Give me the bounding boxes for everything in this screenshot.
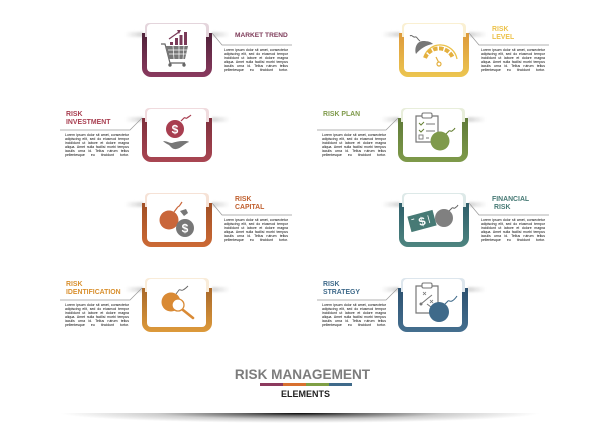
text block: risk capital: incididunt ut labore et dolore magna — [224, 226, 288, 230]
panel: market trend — [128, 23, 292, 77]
text block: risk strategy: Lorem ipsum dolor sit amet, consectetur — [322, 303, 386, 307]
text block: risk capital: aliqua. Amet nulla facilisi morbi tempus — [224, 230, 288, 234]
text block: risk strategy: adipiscing elit, sed do eiusmod tempor — [322, 307, 386, 311]
heading: risk level: LEVEL — [492, 34, 514, 41]
text block: risk plan: incididunt ut labore et dolore magna — [322, 141, 386, 145]
text block: market trend: Lorem ipsum dolor sit amet, consectetur — [224, 48, 288, 52]
icon: checklist clipboard and bomb — [415, 112, 456, 150]
panel: risk strategy — [317, 278, 482, 332]
text block: risk capital: iaculis urna id. Tellus rutrum tellus — [224, 234, 288, 238]
icon: banknote and bomb — [407, 204, 458, 232]
text block: market trend: aliqua. Amet nulla facilisi morbi tempus — [224, 60, 288, 64]
heading: financial risk — [492, 196, 529, 211]
heading: risk investment — [66, 111, 110, 126]
text block: risk identification: iaculis urna id. Tellus rutrum tellus — [65, 319, 129, 323]
text block: risk investment — [65, 133, 129, 157]
text block: risk investment: incididunt ut labore et dolore magna — [65, 141, 129, 145]
heading: risk investment: RISK — [66, 111, 82, 118]
icon: dollar bomb over hand: $ — [172, 122, 179, 136]
text block: risk capital: adipiscing elit, sed do eiusmod tempor — [224, 222, 288, 226]
text block: risk investment: Lorem ipsum dolor sit amet, consectetur — [65, 133, 129, 137]
text block: risk investment: aliqua. Amet nulla facilisi morbi tempus — [65, 145, 129, 149]
text block: market trend: adipiscing elit, sed do eiusmod tempor — [224, 52, 288, 56]
text block: market trend: pellentesque eu tincidunt tortor. — [224, 68, 288, 72]
text block: risk plan: iaculis urna id. Tellus rutrum tellus — [322, 149, 386, 153]
panel: risk plan — [317, 108, 482, 162]
text block: risk identification: aliqua. Amet nulla facilisi morbi tempus — [65, 315, 129, 319]
icon: shopping cart with rising bars — [161, 30, 188, 67]
text block: risk capital: Lorem ipsum dolor sit amet, consectetur — [224, 218, 288, 222]
text block: risk plan: adipiscing elit, sed do eiusmod tempor — [322, 137, 386, 141]
heading: risk capital: CAPITAL — [235, 204, 264, 211]
title: RISK MANAGEMENT — [235, 367, 370, 382]
heading: risk identification: IDENTIFICATION — [66, 289, 121, 296]
text block: risk capital: pellentesque eu tincidunt tortor. — [224, 238, 288, 242]
subtitle: ELEMENTS — [281, 389, 330, 399]
text block: risk plan: Lorem ipsum dolor sit amet, consectetur — [322, 133, 386, 137]
text block: financial risk: adipiscing elit, sed do eiusmod tempor — [481, 222, 545, 226]
heading: financial risk: RISK — [494, 204, 510, 211]
text block: risk strategy: iaculis urna id. Tellus rutrum tellus — [322, 319, 386, 323]
heading: risk level — [492, 26, 514, 41]
text block: risk investment: iaculis urna id. Tellus rutrum tellus — [65, 149, 129, 153]
text block: risk investment: pellentesque eu tincidunt tortor. — [65, 153, 129, 157]
icon: bomb and money bag: $ — [182, 222, 189, 236]
text block: risk strategy: incididunt ut labore et dolore magna — [322, 311, 386, 315]
text block: risk identification: incididunt ut labore et dolore magna — [65, 311, 129, 315]
text block: market trend: iaculis urna id. Tellus rutrum tellus — [224, 64, 288, 68]
text block: financial risk — [481, 218, 545, 242]
icon: dollar bomb over hand — [163, 114, 192, 150]
heading: market trend: MARKET TREND — [235, 32, 288, 39]
text block: risk strategy: pellentesque eu tincidunt tortor. — [322, 323, 386, 327]
heading: financial risk: FINANCIAL — [492, 196, 529, 203]
icon: banknote and bomb: $ — [417, 214, 427, 229]
text block: risk level: iaculis urna id. Tellus rutrum tellus — [481, 64, 545, 68]
panel: financial risk — [386, 193, 549, 247]
text block: risk identification: pellentesque eu tincidunt tortor. — [65, 323, 129, 327]
text block: risk level: adipiscing elit, sed do eiusmod tempor — [481, 52, 545, 56]
text block: risk investment: adipiscing elit, sed do eiusmod tempor — [65, 137, 129, 141]
text block: risk identification — [65, 303, 129, 327]
panel: risk level — [386, 23, 549, 77]
heading: risk identification: RISK — [66, 281, 82, 288]
colour bar — [260, 383, 352, 386]
text block: financial risk: pellentesque eu tincidunt tortor. — [481, 238, 545, 242]
text block: risk level: Lorem ipsum dolor sit amet, consectetur — [481, 48, 545, 52]
text block: risk plan — [322, 133, 386, 157]
heading: risk plan: RISK PLAN — [323, 111, 360, 118]
text block: financial risk: incididunt ut labore et dolore magna — [481, 226, 545, 230]
text block: risk plan: pellentesque eu tincidunt tortor. — [322, 153, 386, 157]
heading: risk identification — [66, 281, 121, 296]
panel: risk investment — [60, 108, 226, 162]
text block: risk identification: adipiscing elit, sed do eiusmod tempor — [65, 307, 129, 311]
icon: bomb and money bag — [160, 202, 194, 237]
heading: risk level: RISK — [492, 26, 508, 33]
panel: risk identification — [60, 278, 226, 332]
text block: risk identification: Lorem ipsum dolor sit amet, consectetur — [65, 303, 129, 307]
text block: market trend — [224, 48, 288, 72]
heading: risk investment: INVESTMENT — [66, 119, 110, 126]
text block: financial risk: Lorem ipsum dolor sit amet, consectetur — [481, 218, 545, 222]
text block: risk strategy — [322, 303, 386, 327]
text block: risk level: pellentesque eu tincidunt tortor. — [481, 68, 545, 72]
text block: risk level: incididunt ut labore et dolore magna — [481, 56, 545, 60]
text block: risk plan: aliqua. Amet nulla facilisi morbi tempus — [322, 145, 386, 149]
heading: risk strategy — [323, 281, 360, 296]
heading: risk strategy: RISK — [323, 281, 339, 288]
text block: risk strategy: aliqua. Amet nulla facilisi morbi tempus — [322, 315, 386, 319]
text block: risk level — [481, 48, 545, 72]
heading: risk capital — [235, 196, 264, 211]
heading: risk strategy: STRATEGY — [323, 289, 360, 296]
icon: bomb and risk gauge — [410, 35, 458, 67]
text block: financial risk: aliqua. Amet nulla facilisi morbi tempus — [481, 230, 545, 234]
panel: risk capital — [128, 193, 292, 247]
text block: financial risk: iaculis urna id. Tellus rutrum tellus — [481, 234, 545, 238]
icon: strategy clipboard and bomb — [415, 282, 458, 322]
heading: risk capital: RISK — [235, 196, 251, 203]
icon: bomb under magnifying glass — [162, 286, 194, 320]
ground shadow — [60, 413, 540, 423]
text block: market trend: incididunt ut labore et dolore magna — [224, 56, 288, 60]
text block: risk level: aliqua. Amet nulla facilisi morbi tempus — [481, 60, 545, 64]
text block: risk capital — [224, 218, 288, 242]
